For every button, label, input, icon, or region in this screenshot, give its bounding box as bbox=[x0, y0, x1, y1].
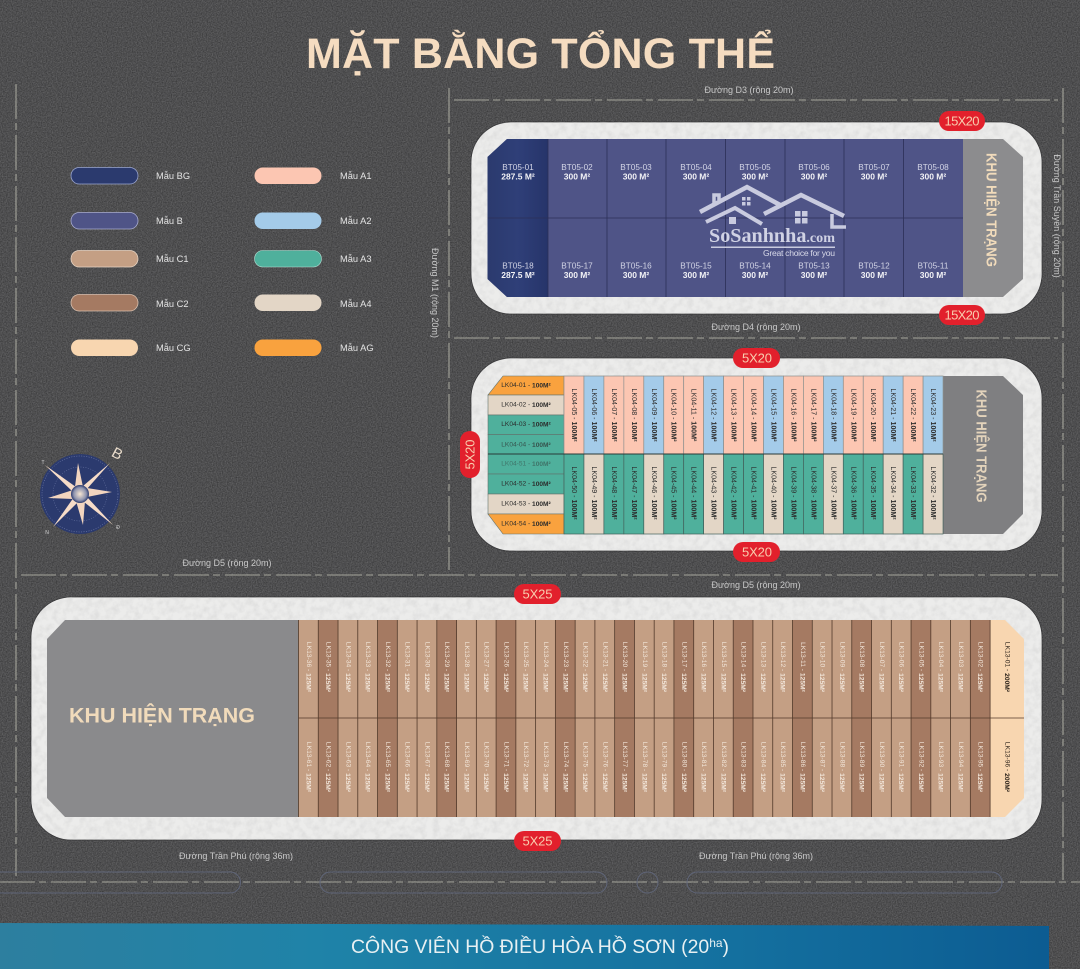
top row labels: LK13-10 - 125M² bbox=[819, 642, 826, 693]
bottom row labels: LK13-93 - 125M² bbox=[937, 742, 944, 793]
top row labels: LK04-05 - 100M² bbox=[570, 388, 578, 442]
bottom row labels: LK04-34 - 100M² bbox=[889, 466, 897, 520]
top row labels: LK13-24 - 125M² bbox=[542, 642, 549, 693]
top row labels: LK13-29 - 125M² bbox=[443, 642, 450, 693]
top row labels: LK04-07 - 100M² bbox=[610, 388, 618, 442]
legend item: AG: Mẫu AG bbox=[340, 343, 374, 353]
top row labels: LK04-19 - 100M² bbox=[849, 388, 857, 442]
lake name: ha bbox=[709, 936, 723, 950]
existing area bbox=[943, 376, 1023, 534]
underground outlines at the bottom road bbox=[0, 872, 1002, 893]
top row labels: LK13-25 - 125M² bbox=[522, 642, 529, 693]
top row labels: LK13-21 - 125M² bbox=[601, 642, 608, 693]
badge: 5X25 bottom: 5X25 bbox=[522, 834, 552, 848]
lot labels bottom: 300 M² bbox=[861, 270, 887, 280]
lot labels bottom: 300 M² bbox=[564, 270, 590, 280]
bottom row labels: LK13-71 - 125M² bbox=[502, 742, 510, 793]
left stacked lot labels: LK04-03 - 100M² bbox=[501, 421, 552, 428]
lot labels bottom bbox=[501, 262, 949, 280]
left stacked lot labels: LK04-54 - 100M² bbox=[501, 520, 552, 528]
lake name: CÔNG VIÊN HỒ ĐIỀU HÒA HỒ SƠN (20 bbox=[351, 936, 709, 958]
legend item: A2 bbox=[254, 212, 372, 229]
top row labels: LK13-08 - 125M² bbox=[858, 642, 865, 693]
top row labels: LK13-26 - 125M² bbox=[502, 642, 510, 693]
bottom row labels: LK04-47 - 100M² bbox=[630, 466, 638, 520]
left stacked lot labels bbox=[501, 382, 552, 528]
bottom row labels: LK04-37 - 100M² bbox=[829, 466, 837, 520]
lot labels top: BT05-02 bbox=[561, 163, 593, 172]
bottom row labels: LK13-84 - 125M² bbox=[759, 742, 766, 793]
bottom row labels: LK13-87 - 125M² bbox=[819, 742, 826, 793]
badge: 15X20 bottom: 15X20 bbox=[944, 308, 980, 322]
C2 lots bbox=[318, 620, 990, 817]
bottom row labels: LK13-89 - 125M² bbox=[858, 742, 865, 793]
lot labels top: 287.5 M² bbox=[501, 172, 535, 182]
top row labels: LK13-18 - 125M² bbox=[661, 642, 668, 693]
top row labels: LK13-19 - 125M² bbox=[641, 642, 648, 693]
legend item: B: Mẫu B bbox=[156, 216, 183, 226]
lot labels bottom: BT05-17 bbox=[561, 262, 593, 270]
existing area label: KHU HIỆN TRẠNG bbox=[982, 153, 1000, 267]
bottom row labels: LK13-94 - 125M² bbox=[957, 742, 964, 793]
top row labels: LK04-22 - 100M² bbox=[909, 388, 917, 442]
badge: 15X20 top: 15X20 bbox=[944, 114, 980, 128]
top row labels: LK13-06 - 125M² bbox=[898, 642, 905, 693]
bottom row labels: LK04-45 - 100M² bbox=[670, 466, 678, 520]
top row labels: LK13-31 - 125M² bbox=[404, 642, 411, 693]
top row labels: LK04-20 - 100M² bbox=[869, 388, 877, 442]
badge: 5X25 top bbox=[514, 584, 561, 604]
bottom row labels: LK04-48 - 100M² bbox=[610, 466, 618, 520]
lot labels top: 300 M² bbox=[742, 172, 768, 182]
lot labels bottom: 287.5 M² bbox=[501, 270, 535, 280]
badge: 5X20 bottom: 5X20 bbox=[742, 544, 772, 560]
lot labels bottom: BT05-11 bbox=[918, 262, 949, 270]
badge: 5X20 bottom bbox=[733, 542, 780, 562]
legend item: A4: Mẫu A4 bbox=[340, 299, 372, 309]
existing area bbox=[47, 620, 298, 817]
top row labels: LK04-12 - 100M² bbox=[710, 388, 718, 442]
bottom row labels: LK04-49 - 100M² bbox=[590, 466, 598, 520]
bottom row labels: LK13-95 - 125M² bbox=[977, 742, 984, 793]
badge: 5X20 top bbox=[733, 348, 780, 368]
top row labels: LK13-03 - 125M² bbox=[957, 642, 964, 693]
top row labels: LK04-10 - 100M² bbox=[670, 388, 678, 442]
bottom row labels: LK13-91 - 125M² bbox=[898, 742, 905, 793]
top row labels bbox=[305, 642, 1010, 693]
road label: Tran Phu left: Đường Trần Phú (rộng 36m) bbox=[179, 851, 293, 861]
top row labels: LK04-14 - 100M² bbox=[750, 388, 758, 442]
icon: compass bbox=[40, 444, 125, 536]
legend item: BG bbox=[71, 168, 190, 184]
bottom row labels: LK13-80 - 125M² bbox=[680, 742, 687, 793]
top row labels: LK13-11 - 125M² bbox=[799, 642, 806, 693]
legend item: A3 bbox=[254, 250, 372, 267]
lot labels top: 300 M² bbox=[861, 172, 887, 182]
lot labels top: 300 M² bbox=[683, 172, 709, 182]
lots row fill bbox=[488, 139, 963, 297]
top row labels: LK13-01 - 200M² bbox=[1004, 642, 1010, 693]
legend item: CG: Mẫu CG bbox=[156, 343, 191, 353]
bottom row labels: LK13-81 - 125M² bbox=[700, 742, 707, 793]
existing area label: KHU HIỆN TRẠNG bbox=[972, 390, 990, 502]
lot labels top bbox=[501, 163, 949, 182]
bottom row labels: LK04-35 - 100M² bbox=[869, 466, 877, 520]
top row labels: LK04-21 - 100M² bbox=[889, 388, 897, 442]
lake banner bbox=[0, 923, 1049, 969]
bottom row labels: LK13-79 - 125M² bbox=[661, 742, 668, 793]
bottom row labels: LK13-85 - 125M² bbox=[779, 742, 786, 793]
bottom row labels: LK13-83 - 125M² bbox=[740, 742, 747, 793]
road label: D5 left: Đường D5 (rộng 20m) bbox=[183, 558, 271, 568]
road label: D5 right: Đường D5 (rộng 20m) bbox=[712, 580, 800, 590]
bottom row labels: LK13-88 - 125M² bbox=[838, 742, 845, 793]
lot labels top: 300 M² bbox=[920, 172, 946, 182]
bottom row labels: LK13-82 - 125M² bbox=[720, 742, 727, 793]
lake name: ) bbox=[723, 936, 729, 958]
legend item: A1 bbox=[254, 168, 372, 184]
bottom row labels: LK13-64 - 125M² bbox=[364, 742, 371, 793]
left stacked lot labels: LK04-51 - 100M² bbox=[501, 460, 552, 468]
bottom row labels: LK13-90 - 125M² bbox=[878, 742, 885, 793]
bottom row labels: LK04-42 - 100M² bbox=[730, 466, 738, 520]
top row labels: LK13-30 - 125M² bbox=[423, 642, 430, 693]
lot labels top: 300 M² bbox=[801, 172, 827, 182]
top row labels: LK13-36 - 125M² bbox=[305, 642, 312, 693]
legend item: AG bbox=[254, 340, 374, 356]
left stacked lot labels: LK04-02 - 100M² bbox=[501, 402, 552, 408]
lot labels top: BT05-05 bbox=[739, 163, 771, 172]
bottom row labels: LK04-40 - 100M² bbox=[770, 466, 778, 520]
top row labels: LK04-23 - 100M² bbox=[929, 388, 937, 442]
bottom row labels: LK13-77 - 125M² bbox=[621, 742, 628, 793]
top row labels: LK13-27 - 125M² bbox=[483, 642, 490, 693]
top row labels: LK04-09 - 100M² bbox=[650, 388, 658, 442]
bottom row labels: LK04-50 - 100M² bbox=[570, 466, 578, 520]
existing area label: KHU HIỆN TRẠNG bbox=[69, 704, 255, 728]
lot labels bottom: BT05-15 bbox=[680, 262, 712, 270]
legend item: C1: Mẫu C1 bbox=[156, 254, 189, 264]
lot labels top: BT05-06 bbox=[798, 163, 830, 172]
badge: 5X20 left: 5X20 bbox=[462, 440, 478, 470]
top row labels: LK13-32 - 125M² bbox=[384, 642, 391, 693]
top row labels: LK13-09 - 125M² bbox=[838, 642, 845, 693]
bottom row labels: LK04-43 - 100M² bbox=[710, 466, 718, 520]
lot labels bottom: BT05-13 bbox=[798, 262, 830, 270]
top row labels: LK13-23 - 125M² bbox=[562, 642, 569, 693]
top row labels: LK13-16 - 125M² bbox=[700, 642, 707, 693]
legend item: A3: Mẫu A3 bbox=[340, 254, 372, 264]
bottom row labels bbox=[570, 466, 937, 520]
lot labels bottom: 300 M² bbox=[683, 270, 709, 280]
legend bbox=[71, 168, 374, 356]
legend item: A1: Mẫu A1 bbox=[340, 171, 372, 181]
lot labels bottom: 300 M² bbox=[920, 270, 946, 280]
existing area bbox=[963, 139, 1023, 297]
road label: M1: Đường M1 (rộng 20m) bbox=[430, 248, 440, 338]
top row lots bbox=[564, 376, 943, 454]
bottom row labels: LK04-41 - 100M² bbox=[750, 466, 758, 520]
bottom row labels: LK04-36 - 100M² bbox=[849, 466, 857, 520]
panel base bbox=[471, 122, 1042, 314]
top row labels: LK13-14 - 125M² bbox=[740, 642, 747, 693]
bottom row labels: LK13-92 - 125M² bbox=[917, 742, 924, 793]
lot labels top: BT05-01 bbox=[502, 163, 534, 172]
lot labels top: 300 M² bbox=[564, 172, 590, 182]
top row labels: LK13-04 - 125M² bbox=[937, 642, 944, 693]
icon: compass: Đ bbox=[116, 525, 120, 531]
lot labels top: BT05-04 bbox=[680, 163, 712, 172]
top row labels: LK04-06 - 100M² bbox=[590, 388, 598, 442]
bottom row labels: LK04-46 - 100M² bbox=[650, 466, 658, 520]
lot labels top: BT05-08 bbox=[917, 163, 949, 172]
bottom row labels: LK04-38 - 100M² bbox=[809, 466, 817, 520]
bottom row labels: LK13-74 - 125M² bbox=[562, 742, 569, 793]
bottom row labels: LK13-67 - 125M² bbox=[423, 742, 430, 793]
panel: LK04 townhouses bbox=[471, 358, 1042, 551]
panel base bbox=[31, 597, 1042, 840]
title: MẶT BẰNG TỔNG THỂ bbox=[306, 28, 775, 78]
legend item: BG: Mẫu BG bbox=[156, 171, 190, 181]
lot labels bottom: 300 M² bbox=[801, 270, 827, 280]
top row labels: LK04-13 - 100M² bbox=[730, 388, 738, 442]
legend item: B bbox=[71, 212, 183, 229]
bottom row labels: LK13-61 - 125M² bbox=[305, 742, 312, 793]
top row labels: LK13-17 - 125M² bbox=[680, 642, 687, 693]
top row labels: LK13-22 - 125M² bbox=[582, 642, 588, 693]
icon: compass: N bbox=[45, 530, 49, 536]
legend item: A2: Mẫu A2 bbox=[340, 216, 372, 226]
top row labels: LK04-11 - 100M² bbox=[690, 389, 698, 442]
watermark: SoSanhnha.com bbox=[709, 225, 835, 247]
top row labels bbox=[570, 388, 937, 442]
bottom row labels: LK04-39 - 100M² bbox=[789, 466, 797, 520]
bottom row labels: LK13-78 - 125M² bbox=[641, 742, 648, 793]
top row labels: LK13-13 - 125M² bbox=[759, 642, 766, 693]
bottom row labels: LK13-66 - 125M² bbox=[404, 742, 411, 793]
lot labels bottom: BT05-16 bbox=[620, 262, 652, 270]
bottom row labels: LK13-72 - 125M² bbox=[522, 742, 529, 793]
bottom row labels: LK13-62 - 125M² bbox=[325, 742, 332, 793]
bottom row labels: LK13-96 - 200M² bbox=[1004, 742, 1010, 793]
icon: compass: B bbox=[109, 444, 125, 464]
badge: 15X20 top bbox=[939, 111, 985, 131]
lot labels bottom: BT05-18 bbox=[502, 262, 534, 270]
road label: Tran Suyen: Đường Trần Suyền (rộng 20m) bbox=[1052, 154, 1062, 278]
top row labels: LK13-05 - 125M² bbox=[917, 642, 924, 693]
badge: 5X20 top: 5X20 bbox=[742, 350, 772, 366]
left stacked lot labels: LK04-04 - 100M² bbox=[501, 442, 552, 448]
bottom row labels: LK04-32 - 100M² bbox=[929, 466, 937, 520]
panel base bbox=[471, 358, 1042, 551]
bottom row labels: LK13-68 - 125M² bbox=[443, 742, 450, 793]
road label: Tran Phu right: Đường Trần Phú (rộng 36m) bbox=[699, 851, 813, 861]
lot labels top: 300 M² bbox=[623, 172, 649, 182]
lot labels bottom: BT05-12 bbox=[858, 262, 890, 270]
left stacked lot labels: LK04-01 - 100M² bbox=[501, 382, 552, 389]
top row labels: LK04-16 - 100M² bbox=[789, 388, 797, 442]
bottom row labels: LK13-75 - 125M² bbox=[582, 742, 588, 793]
legend item: C1 bbox=[71, 250, 189, 267]
watermark: Great choice for you bbox=[763, 248, 835, 258]
left stacked lot labels: LK04-52 - 100M² bbox=[501, 480, 552, 488]
top row labels: LK13-34 - 125M² bbox=[344, 642, 351, 693]
badge: 5X25 bottom bbox=[514, 831, 561, 851]
bottom row labels bbox=[305, 742, 1010, 793]
bottom row labels: LK13-73 - 125M² bbox=[542, 742, 549, 793]
bottom row labels: LK13-63 - 125M² bbox=[344, 742, 351, 793]
top row labels: LK04-17 - 100M² bbox=[809, 388, 817, 442]
CG corner lots bbox=[990, 620, 1024, 817]
lot labels top: BT05-07 bbox=[858, 163, 890, 172]
icon: compass: T bbox=[41, 460, 45, 466]
lot labels top: BT05-03 bbox=[620, 163, 652, 172]
legend item: CG bbox=[71, 340, 191, 356]
top row labels: LK04-08 - 100M² bbox=[630, 388, 638, 442]
top row labels: LK13-07 - 125M² bbox=[878, 642, 885, 693]
top row labels: LK13-12 - 125M² bbox=[779, 642, 786, 693]
top row labels: LK13-15 - 125M² bbox=[720, 642, 727, 693]
bottom row labels: LK13-70 - 125M² bbox=[483, 742, 490, 793]
top row labels: LK13-20 - 125M² bbox=[621, 642, 628, 693]
bottom row labels: LK13-69 - 125M² bbox=[463, 742, 470, 793]
legend item: C2: Mẫu C2 bbox=[156, 299, 189, 309]
badge: 5X25 top: 5X25 bbox=[522, 586, 552, 602]
legend item: C2 bbox=[71, 294, 189, 311]
watermark bbox=[700, 187, 846, 258]
top row labels: LK04-18 - 100M² bbox=[829, 388, 837, 442]
panel: LK13 townhouses bbox=[31, 597, 1042, 840]
bottom row labels: LK13-65 - 125M² bbox=[384, 742, 391, 793]
lot column BG bbox=[488, 139, 548, 297]
bottom row lots bbox=[564, 454, 943, 534]
road label: D3: Đường D3 (rộng 20m) bbox=[705, 85, 793, 95]
lot labels bottom: BT05-14 bbox=[739, 262, 771, 270]
lot labels bottom: 300 M² bbox=[742, 270, 768, 280]
bottom row labels: LK13-86 - 125M² bbox=[799, 742, 806, 793]
lot labels bottom: 300 M² bbox=[623, 270, 649, 280]
road label: D4: Đường D4 (rộng 20m) bbox=[712, 322, 800, 332]
top row labels: LK13-35 - 125M² bbox=[325, 642, 332, 693]
bottom row labels: LK13-76 - 125M² bbox=[601, 742, 608, 793]
bottom row labels: LK04-33 - 100M² bbox=[909, 466, 917, 520]
top row labels: LK13-33 - 125M² bbox=[364, 642, 371, 693]
badge: 15X20 bottom bbox=[939, 305, 985, 325]
top row labels: LK04-15 - 100M² bbox=[770, 388, 778, 442]
panel: BT05 villas bbox=[471, 122, 1042, 314]
top row labels: LK13-28 - 125M² bbox=[463, 642, 470, 693]
left stacked lots bbox=[488, 376, 564, 534]
legend item: A4 bbox=[254, 294, 372, 311]
badge: 5X20 left bbox=[460, 431, 480, 478]
left stacked lot labels: LK04-53 - 100M² bbox=[501, 500, 552, 508]
top row labels: LK13-02 - 125M² bbox=[977, 642, 984, 693]
bottom row labels: LK04-44 - 100M² bbox=[690, 466, 698, 520]
C1 lots fill bbox=[298, 620, 990, 817]
